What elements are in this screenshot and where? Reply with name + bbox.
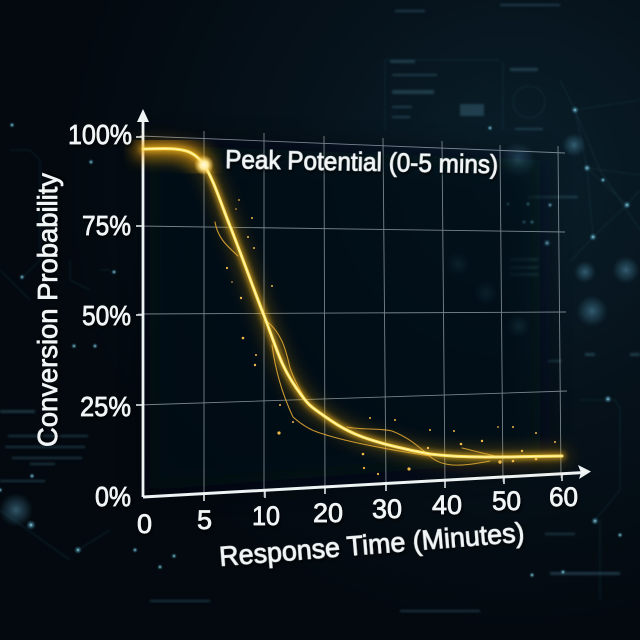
peak marker [194,155,214,175]
x axis tick labels: 5 [197,505,212,535]
y axis tick labels: 50% [82,300,131,331]
x axis tick labels [137,482,578,539]
peak label: Peak Potential (0-5 mins) [225,144,498,179]
y axis tick labels: 25% [80,391,131,422]
y axis tick labels: 100% [68,119,132,150]
y axis tick labels: 75% [82,210,131,241]
x axis tick labels: 10 [252,501,280,531]
x axis tick labels: 20 [313,498,343,528]
gold sparkles [226,199,556,475]
x axis tick labels: 0 [137,509,152,539]
plot area background [150,145,540,490]
secondary strands [215,222,500,465]
x axis tick labels: 30 [372,494,402,524]
x axis tick labels: 50 [492,486,521,516]
y axis tick labels: 0% [95,481,131,512]
x axis arrow [143,465,591,501]
gridlines [138,131,567,500]
chart [32,109,591,572]
y axis title: Conversion Probability [32,173,63,447]
y axis tick labels [68,119,132,512]
x axis tick labels: 40 [432,490,462,520]
curve: conversion decay [143,148,562,465]
x axis title: Response Time (Minutes) [218,517,525,572]
x axis tick labels: 60 [549,482,578,512]
y axis arrow [136,109,149,497]
